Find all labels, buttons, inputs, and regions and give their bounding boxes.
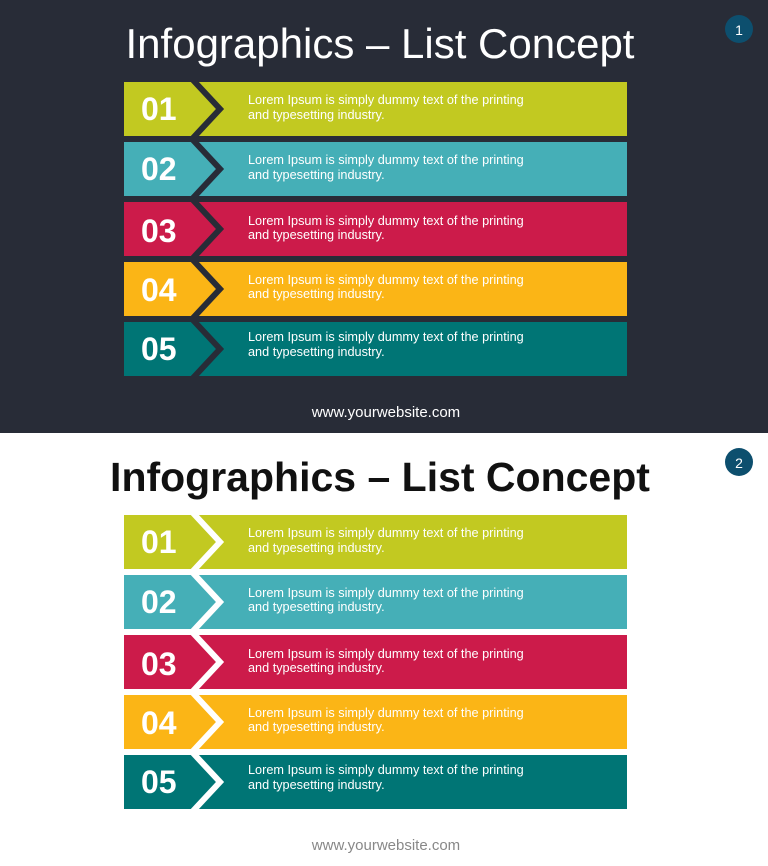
row 05 — [124, 320, 627, 378]
row 03: Lorem Ipsum is simply dummy text of the printing — [248, 214, 524, 228]
row 05: Lorem Ipsum is simply dummy text of the printing — [248, 763, 524, 777]
row 04: and typesetting industry. — [248, 720, 385, 734]
row 02 — [124, 140, 627, 198]
row 04 — [124, 693, 627, 751]
row 03: 03 — [141, 213, 177, 249]
footer light: www.yourwebsite.com — [311, 837, 460, 854]
row 03: Lorem Ipsum is simply dummy text of the printing — [248, 647, 524, 661]
row 04: Lorem Ipsum is simply dummy text of the printing — [248, 706, 524, 720]
panel: dark version — [0, 0, 768, 433]
row 02: Lorem Ipsum is simply dummy text of the printing — [248, 153, 524, 167]
row 03: 03 — [141, 646, 177, 682]
title dark: Infographics – List Concept — [126, 20, 635, 67]
row 02: 02 — [141, 584, 177, 620]
row 05: and typesetting industry. — [248, 345, 385, 359]
row 02 — [124, 573, 627, 631]
row 02: and typesetting industry. — [248, 168, 385, 182]
row 04: 04 — [141, 272, 177, 308]
badge 2: 2 — [735, 455, 743, 471]
row 05: and typesetting industry. — [248, 778, 385, 792]
row 05: Lorem Ipsum is simply dummy text of the printing — [248, 330, 524, 344]
row 02: Lorem Ipsum is simply dummy text of the printing — [248, 586, 524, 600]
panel: light version — [0, 433, 768, 866]
badge 1: 1 — [735, 22, 743, 38]
list dark — [124, 80, 627, 378]
row 02: and typesetting industry. — [248, 600, 385, 614]
row 05: 05 — [141, 331, 177, 367]
row 03 — [124, 200, 627, 258]
row 05 — [124, 753, 627, 811]
row 01: and typesetting industry. — [248, 108, 385, 122]
row 05: 05 — [141, 764, 177, 800]
row 01: Lorem Ipsum is simply dummy text of the printing — [248, 526, 524, 540]
title light: Infographics – List Concept — [110, 454, 650, 500]
row 03: and typesetting industry. — [248, 661, 385, 675]
footer dark: www.yourwebsite.com — [311, 404, 460, 421]
badge 1 — [725, 15, 753, 43]
badge 2 — [725, 448, 753, 476]
row 02: 02 — [141, 151, 177, 187]
row 03 — [124, 633, 627, 691]
row 01: 01 — [141, 91, 177, 127]
row 01: 01 — [141, 524, 177, 560]
row 04 — [124, 260, 627, 318]
list light — [124, 513, 627, 811]
row 03: and typesetting industry. — [248, 228, 385, 242]
row 01: Lorem Ipsum is simply dummy text of the printing — [248, 93, 524, 107]
row 04: and typesetting industry. — [248, 287, 385, 301]
row 01: and typesetting industry. — [248, 541, 385, 555]
row 01 — [124, 80, 627, 138]
row 01 — [124, 513, 627, 571]
row 04: 04 — [141, 705, 177, 741]
row 04: Lorem Ipsum is simply dummy text of the printing — [248, 273, 524, 287]
